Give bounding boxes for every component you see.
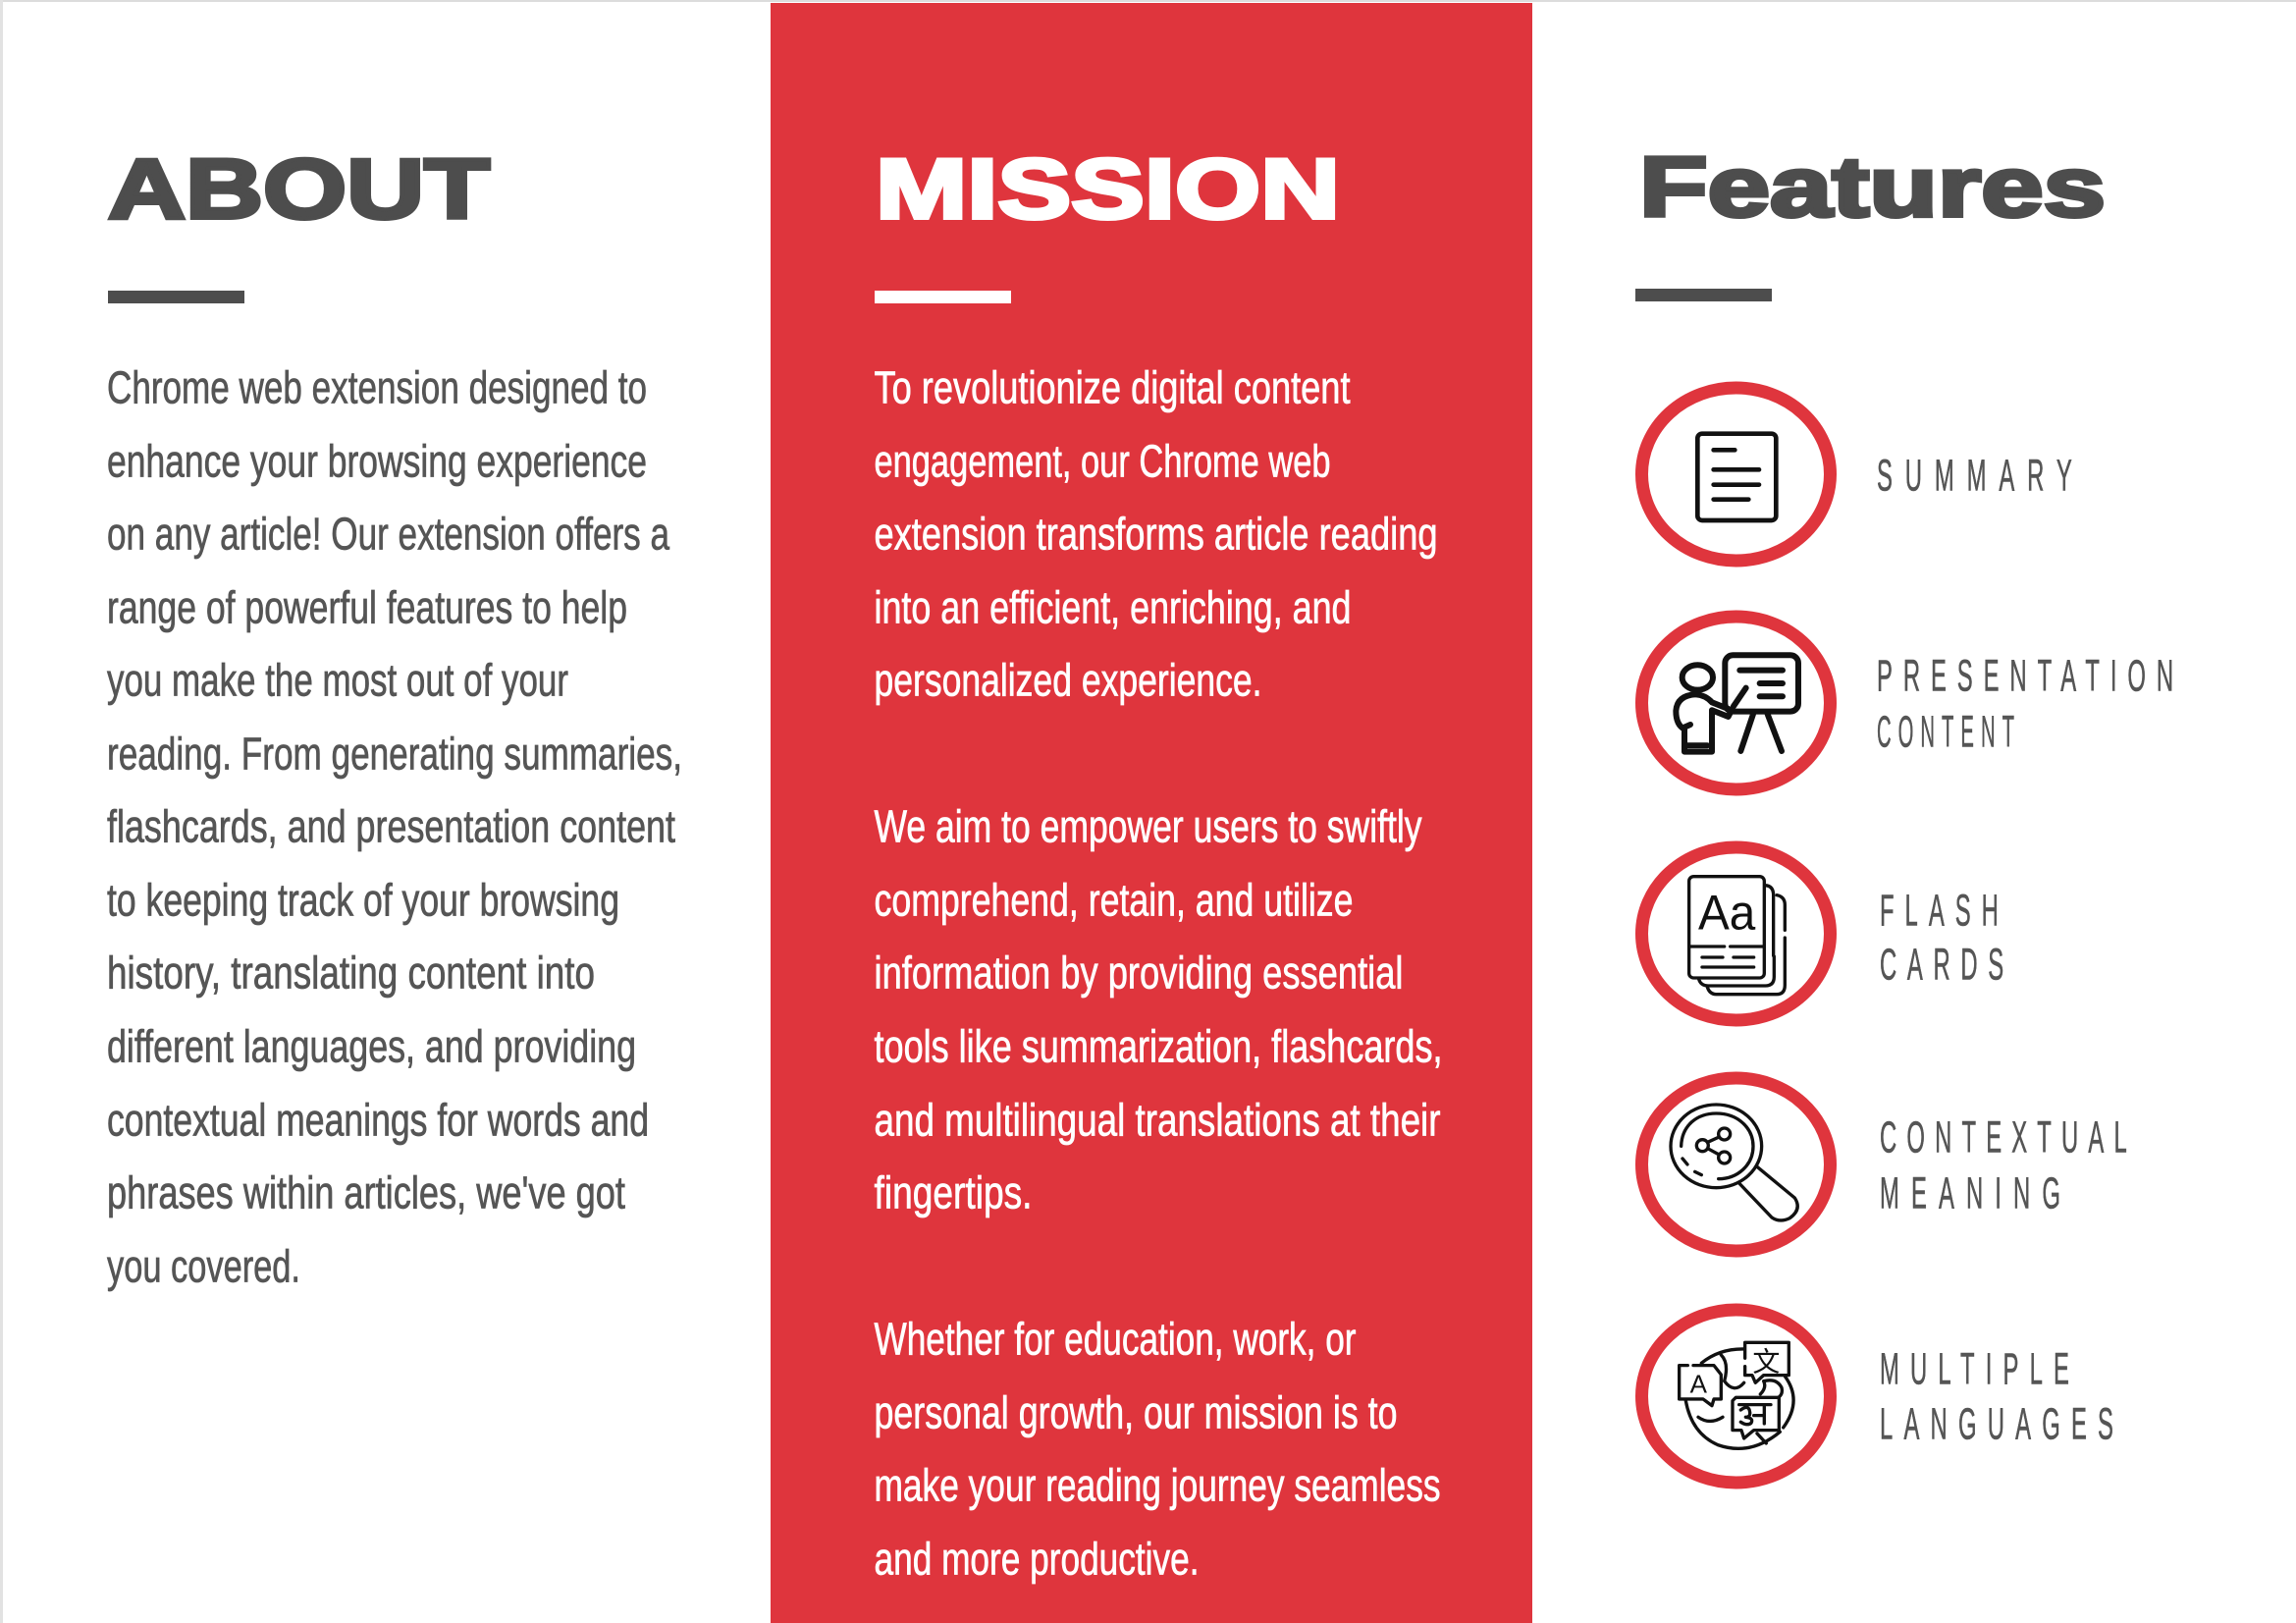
text block: about body: range of powerful features to help	[107, 581, 627, 632]
icon: document in red ring	[1641, 388, 1830, 561]
text block: mission body: information by providing essential	[874, 947, 1404, 998]
text block: about body: history, translating content into	[107, 947, 595, 998]
text block: mission body: and more productive.	[874, 1534, 1200, 1585]
icon: magnifier with share nodes in red ring	[1641, 1078, 1830, 1251]
text block: about body: you make the most out of your	[107, 654, 568, 705]
label: summary: SUMMARY	[1877, 450, 2072, 500]
text block: mission body: Whether for education, work, or	[874, 1314, 1357, 1365]
label: contextual meaning: MEANING	[1880, 1167, 2060, 1217]
text block: mission body: and multilingual translations at their	[874, 1094, 1441, 1145]
text block: about body: you covered.	[107, 1241, 300, 1292]
feature: summary	[1641, 388, 2072, 561]
heading: about: ABOUT	[108, 142, 490, 237]
icon: presenter at board in red ring	[1641, 617, 1830, 789]
text block: mission body: We aim to empower users to swiftly	[874, 801, 1421, 852]
feature: multiple languages	[1641, 1310, 2113, 1483]
text block: mission body: engagement, our Chrome web	[874, 436, 1331, 487]
text block: about body: different languages, and providing	[107, 1021, 636, 1072]
feature: presentation content	[1641, 617, 2173, 789]
icon: flash card stack in red ring	[1641, 847, 1830, 1020]
feature: flash cards	[1641, 847, 2003, 1020]
text block: about body: to keeping track of your browsing	[107, 874, 619, 925]
text block: mission body: tools like summarization, flashcards,	[874, 1021, 1443, 1072]
icon: globe with speech bubbles in red ring: A	[1690, 1369, 1708, 1398]
text block: mission body: personalized experience.	[874, 654, 1262, 705]
label: multiple languages: MULTIPLE	[1880, 1343, 2069, 1393]
label: presentation content: PRESENTATION	[1877, 650, 2173, 700]
text block: mission body: To revolutionize digital content	[874, 361, 1351, 412]
icon: flash card stack in red ring: Aa	[1698, 886, 1756, 941]
panel: mission	[771, 3, 1532, 1623]
text block: mission body: extension transforms article reading	[874, 509, 1437, 560]
text block: mission body: personal growth, our mission is to	[874, 1386, 1398, 1437]
mission heading underline	[875, 291, 1011, 303]
label: multiple languages: LANGUAGES	[1880, 1398, 2113, 1448]
text block: about body: on any article! Our extension offers a	[107, 509, 669, 560]
text block: mission body	[874, 361, 1443, 1585]
label: multiple languages	[1880, 1343, 2113, 1448]
text block: about body: phrases within articles, we've got	[107, 1166, 625, 1217]
text block: about body: flashcards, and presentation content	[107, 801, 675, 852]
text block: mission body: fingertips.	[874, 1166, 1033, 1217]
features heading underline	[1635, 289, 1772, 301]
mission red background	[771, 3, 1532, 1623]
text block: about body: reading. From generating summaries,	[107, 729, 682, 780]
icon: globe with speech bubbles in red ring	[1641, 1310, 1830, 1483]
panel: features	[1635, 140, 2173, 1483]
about heading underline	[108, 291, 244, 303]
heading: mission: MISSION	[876, 142, 1340, 237]
text block: mission body: into an efficient, enriching, and	[874, 581, 1351, 632]
text block: about body	[107, 361, 682, 1292]
label: flash cards	[1880, 885, 2003, 989]
label: contextual meaning: CONTEXTUAL	[1880, 1111, 2127, 1162]
panel: about	[107, 142, 682, 1292]
label: presentation content: CONTENT	[1877, 708, 2014, 757]
heading: features: Features	[1639, 140, 2106, 235]
text block: about body: enhance your browsing experience	[107, 436, 647, 487]
text block: mission body: make your reading journey seamless	[874, 1459, 1441, 1510]
feature: contextual meaning	[1641, 1078, 2127, 1251]
label: presentation content	[1877, 650, 2173, 757]
icon: globe with speech bubbles in red ring: 文	[1752, 1347, 1780, 1378]
label: flash cards: CARDS	[1880, 939, 2003, 989]
label: contextual meaning	[1880, 1111, 2127, 1217]
label: flash cards: FLASH	[1880, 885, 1999, 935]
text block: mission body: comprehend, retain, and utilize	[874, 874, 1353, 925]
text block: about body: contextual meanings for words and	[107, 1094, 649, 1145]
text block: about body: Chrome web extension designed to	[107, 361, 647, 412]
